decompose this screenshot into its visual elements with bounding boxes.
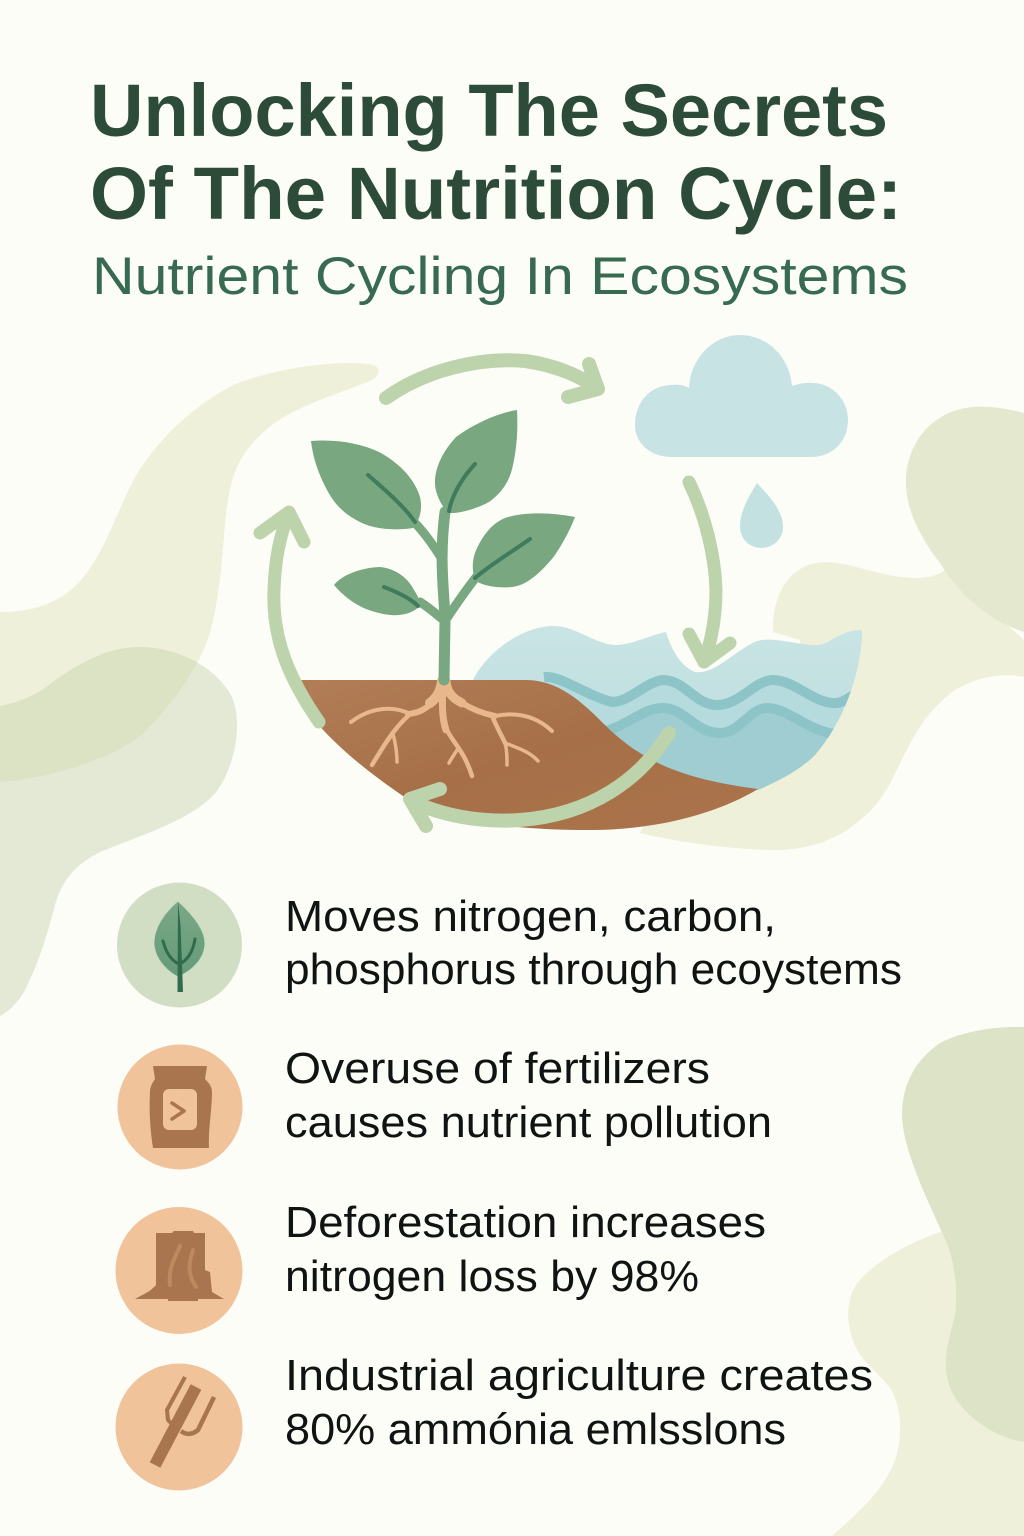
title: Of The Nutrition Cycle: — [90, 152, 902, 235]
arrow: water to soil — [410, 733, 669, 826]
item 4: industrial agriculture — [116, 1351, 873, 1490]
arrow: plant to cloud — [386, 360, 598, 398]
leaf: upper left — [311, 440, 421, 529]
soil — [293, 680, 758, 830]
nutrient cycle illustration — [260, 335, 870, 830]
title — [90, 69, 902, 235]
icon: pitchfork — [116, 1364, 242, 1490]
text: industrial agriculture: 80% ammónia emlsslons — [285, 1405, 786, 1454]
icon: leaf — [117, 882, 242, 1008]
item 3: deforestation — [116, 1198, 766, 1334]
text: nutrient movement: phosphorus through ecoystems — [285, 945, 902, 994]
background blob: right middle pale — [640, 562, 1024, 850]
plant stem — [414, 512, 477, 680]
background blob: lower left — [0, 647, 237, 1016]
text: industrial agriculture: Industrial agriculture creates — [285, 1351, 873, 1400]
text: deforestation: nitrogen loss by 98% — [285, 1252, 699, 1301]
text: fertilizer: Overuse of fertilizers — [285, 1044, 710, 1093]
leaf: lower left — [334, 567, 420, 615]
subtitle: Nutrient Cycling In Ecosystems — [92, 247, 908, 306]
item 2: fertilizer — [118, 1044, 772, 1170]
background blob: bottom right pale — [832, 1220, 1024, 1536]
icon: tree stump — [116, 1207, 242, 1334]
arrow: soil to plant — [260, 512, 319, 722]
icon: cloud — [635, 335, 848, 457]
text: fertilizer: causes nutrient pollution — [285, 1098, 772, 1147]
leaf: right — [473, 513, 575, 587]
leaf: upper middle — [435, 410, 517, 513]
icon: fertilizer bag — [118, 1044, 242, 1170]
text: deforestation: Deforestation increases — [285, 1198, 766, 1247]
item 1: nutrient movement — [117, 882, 902, 1008]
background blob: right upper green — [906, 407, 1024, 632]
plant roots — [351, 681, 552, 776]
text: nutrient movement — [285, 892, 902, 994]
text: deforestation — [285, 1198, 766, 1301]
arrow: rain to water — [689, 482, 730, 662]
text: nutrient movement: Moves nitrogen, carbon, — [285, 892, 776, 941]
text: industrial agriculture — [285, 1351, 873, 1454]
background blob: bottom right green — [902, 1027, 1024, 1442]
water with waves — [473, 626, 870, 800]
background blob: upper left — [0, 363, 378, 782]
title: Unlocking The Secrets — [90, 69, 888, 152]
text: fertilizer — [285, 1044, 772, 1147]
icon: water drop — [740, 483, 783, 548]
leaf veins — [368, 464, 530, 606]
